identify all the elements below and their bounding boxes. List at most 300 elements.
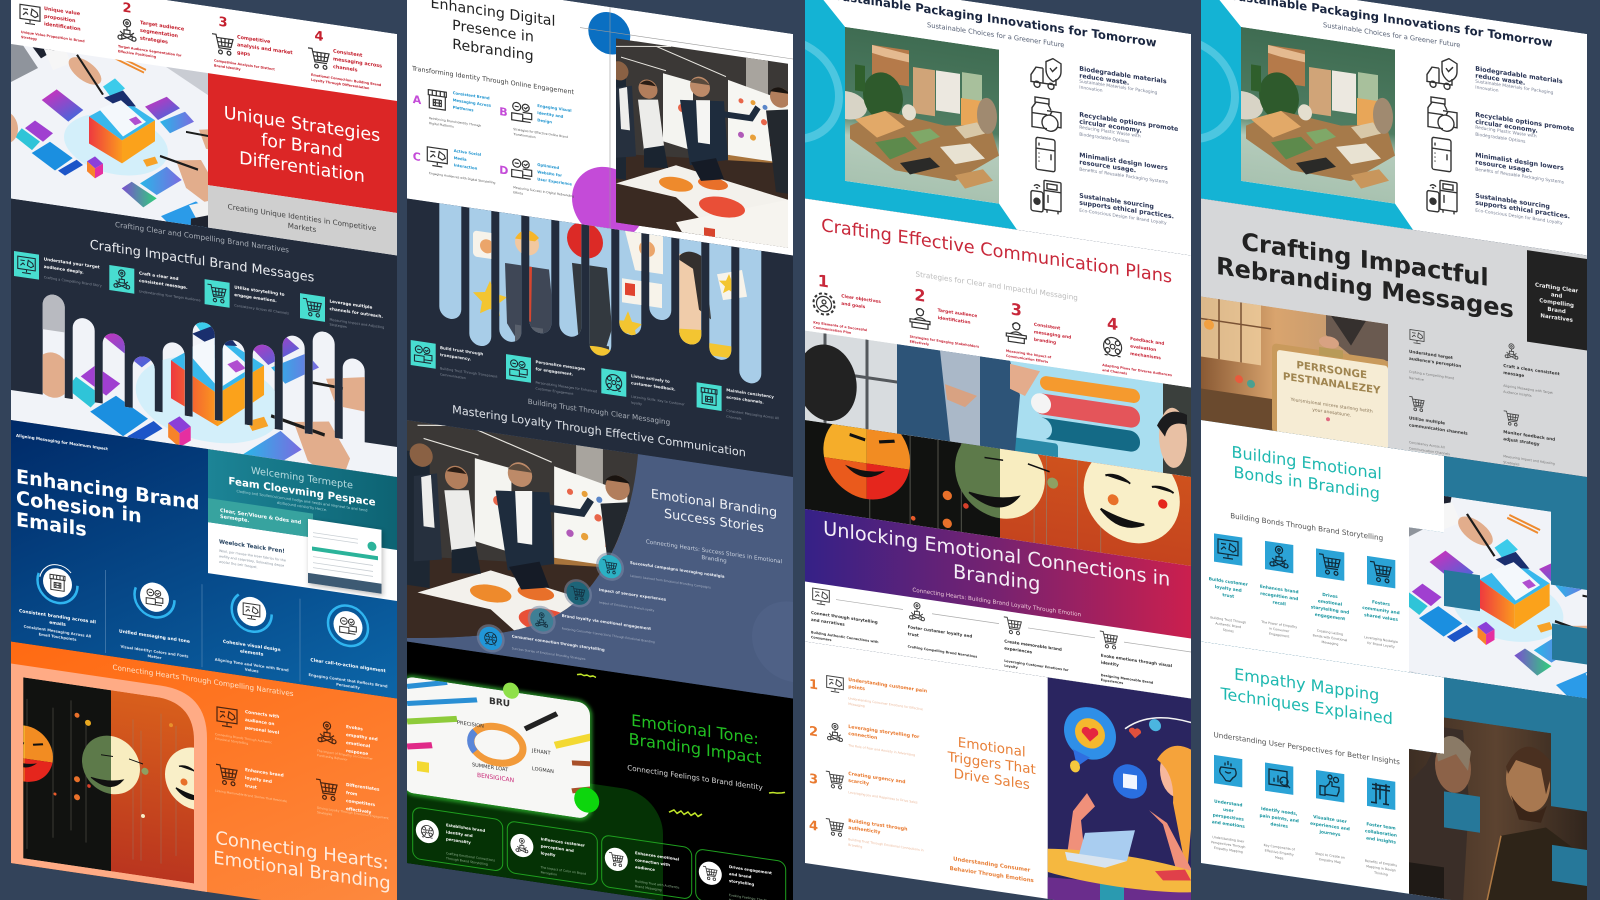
item 3: Fostering Consumer Connections Through Emotional Branding xyxy=(562,626,655,644)
heading: Enhancing Brand xyxy=(16,465,200,515)
column 1: Empathy Mapping xyxy=(1214,846,1243,854)
card 3: Building Trust with Authentic xyxy=(635,879,679,890)
item 2: Aligning Messaging with Target xyxy=(1503,384,1553,395)
black label box xyxy=(1527,250,1587,350)
item 2 xyxy=(910,285,979,354)
card 1: identity and xyxy=(446,829,473,838)
decorative circles xyxy=(572,12,640,232)
item 4: Sustainable sourcing xyxy=(1475,193,1550,211)
card 3: audience xyxy=(635,864,655,872)
photo: branding sketch and markers: PRECISION xyxy=(457,720,484,730)
row 1: Understanding customer pain xyxy=(848,678,927,695)
item 2 xyxy=(119,582,190,660)
item 1 xyxy=(215,706,279,745)
item D xyxy=(499,156,574,203)
item 3: Leveraging Customer Emotions for xyxy=(1004,659,1068,672)
item 4: identity xyxy=(1101,660,1119,667)
subtitle: Understanding User Perspectives for Better Insights xyxy=(1214,730,1400,766)
panel: column 3 slide 3 emotional connections xyxy=(798,322,1264,710)
item 4: evaluation xyxy=(1130,343,1156,353)
white content block xyxy=(1201,420,1444,678)
item 1: Innovation xyxy=(1079,85,1103,94)
item 2 xyxy=(564,577,667,620)
photo: branding sketch and markers xyxy=(402,676,592,820)
item 3: Minimalist design lowers xyxy=(1475,152,1564,172)
column 3: experiences and xyxy=(1310,821,1350,832)
item B: Design xyxy=(537,117,552,124)
heading: Mastering Loyalty Through Effective Communication xyxy=(452,403,746,460)
item 2: Personalizing Messages for Enhanced xyxy=(536,380,597,394)
item 2: Purchasing Behavior xyxy=(317,753,348,762)
item 1: Understand target xyxy=(1409,349,1453,360)
row 4 xyxy=(809,812,924,858)
item 4 xyxy=(697,382,779,426)
photo: branding sketch and markers: BENSIGICAN xyxy=(477,772,514,784)
item 1: Unique Value Proposition in Brand xyxy=(21,30,85,43)
item 4: supports ethical practices. xyxy=(1079,200,1174,220)
item B: B xyxy=(499,105,508,119)
panel: column 3 slide 2 communication plans xyxy=(797,197,1191,479)
item A: Messaging Across xyxy=(453,97,492,108)
photo: personal sign: PERRSONGE xyxy=(1296,359,1367,382)
item 3 xyxy=(1409,396,1468,459)
item 3: Listen actively to xyxy=(631,373,670,384)
item 2: Reducing Plastic Waste with xyxy=(1475,126,1537,140)
item 4: Eco-Conscious Design for Brand Loyalty xyxy=(1475,208,1563,226)
column 3: Empathy Map xyxy=(1319,857,1341,864)
row 3: 3 xyxy=(809,772,818,788)
subtitle: Connecting Hearts: Building Brand Loyalty Through Emotion xyxy=(912,588,1082,619)
item 1: Lessons Learned from Emotional Branding Campaigns xyxy=(630,574,711,590)
item 1: Email Touchpoints xyxy=(39,632,77,642)
accent circles xyxy=(503,681,599,814)
item D: Optimized xyxy=(537,162,559,170)
column 3: Bonds with Emotional xyxy=(1313,633,1347,642)
panel: column 3 slide 1 sustainable packaging xyxy=(741,0,1191,256)
item 2: Customer Engagement xyxy=(536,386,574,396)
item 1: emails xyxy=(49,620,66,628)
item 3: elements xyxy=(240,648,264,658)
item 3 xyxy=(1432,137,1565,189)
item 3: resource usage. xyxy=(1475,159,1532,174)
item 2: Reducing Plastic Waste with xyxy=(1079,126,1141,140)
item 2: Unified messaging and tone xyxy=(119,628,190,645)
image glow xyxy=(402,676,590,820)
item 3: Communication Efforts xyxy=(1006,354,1048,364)
item 4: Measuring Impact and Adjusting xyxy=(330,318,384,330)
panel: column 4 slide 4 empathy mapping xyxy=(1201,642,1591,900)
item 4: Strategies xyxy=(1503,460,1520,467)
item 3: Utilize multiple xyxy=(1409,415,1445,426)
row 4: Building Trust Through Emotional Connections in xyxy=(848,837,924,852)
heading: Differentiation xyxy=(239,149,365,187)
item 3: Competitive Analysis for Distinct xyxy=(214,58,275,71)
white content block xyxy=(1201,642,1444,899)
subtitle: Sustainable Choices for a Greener Future xyxy=(1323,21,1460,49)
item 2: Recyclable options promote xyxy=(1475,112,1574,133)
item 1: audience deeply. xyxy=(44,264,84,275)
item 2: empathy and xyxy=(346,732,378,743)
email template image: Welceming Termepte xyxy=(251,465,353,491)
heading: Drive Sales xyxy=(954,766,1030,793)
heading: for Brand xyxy=(261,131,343,162)
column 2: recall xyxy=(1272,600,1286,608)
subtitle: Building Bonds Through Brand Storytelling xyxy=(1230,511,1383,543)
column 1 xyxy=(1209,533,1249,636)
item 1: Build trust through xyxy=(440,345,483,356)
item 2: strategies xyxy=(140,35,168,46)
column 1: loyalty and xyxy=(1215,584,1242,594)
row 1: points xyxy=(848,684,865,692)
item 4: competitors xyxy=(346,798,376,808)
column 3: Creating Lasting xyxy=(1317,629,1343,636)
item 4: Consistent xyxy=(333,49,362,59)
card 1: Through Brand Storytelling xyxy=(445,856,488,866)
item 3: messaging and xyxy=(1034,329,1071,341)
illustration: faces banner xyxy=(798,322,1264,685)
heading: Emotional Tone: xyxy=(631,711,759,748)
item 2 xyxy=(908,601,977,659)
email template image: Sermepte. xyxy=(220,514,249,524)
item 2 xyxy=(1428,97,1574,152)
photo: personal sign xyxy=(1201,296,1388,450)
heading: Emotional Branding xyxy=(651,487,777,521)
item 3: communication channels xyxy=(1409,422,1468,436)
item 2: Effective Positioning xyxy=(118,49,157,59)
item 1 xyxy=(19,564,96,641)
item 3: experiences xyxy=(1004,645,1033,655)
illustration: emotional faces xyxy=(23,677,194,884)
item 3 xyxy=(528,604,655,651)
panel: column 1 slide 4 connecting hearts xyxy=(0,637,397,900)
photo: branding sketch and markers: LOGMAN xyxy=(532,766,554,775)
heading: Emails xyxy=(16,508,87,541)
column 2 xyxy=(1260,540,1299,640)
photo: packaging materials xyxy=(1223,24,1395,204)
row 3: Leveraging Joy and Happiness to Drive Sales xyxy=(848,790,918,805)
panel: column 2 slide 3 success stories xyxy=(381,392,832,727)
card 3: Enhances emotional xyxy=(635,850,679,862)
column 4 xyxy=(1362,555,1400,650)
column 1: and emotions xyxy=(1212,819,1245,830)
item A: Platforms xyxy=(453,104,474,113)
item 2: identification xyxy=(938,315,970,326)
item 4 xyxy=(1031,178,1174,231)
item 4: Eco-Conscious Design for Brand Loyalty xyxy=(1079,208,1167,226)
item 4: Driving Loyalty Through Emotional Engagement xyxy=(317,806,389,820)
item 3: Consistency Across All Channels xyxy=(234,303,289,316)
item 2: Craft a clear and xyxy=(139,270,179,281)
dividers xyxy=(106,570,300,682)
email template image: Feam Cloevming Pespace xyxy=(228,475,376,509)
email template image: wofilly and cespretay, Solorailing deese xyxy=(219,554,284,568)
item 4: 4 xyxy=(314,29,324,45)
item 2: Crafting Compelling Brand Narratives xyxy=(908,645,977,659)
card 1 xyxy=(413,807,503,872)
heading: Emotional xyxy=(958,735,1026,761)
item D: User Experience xyxy=(537,176,572,187)
item A: A xyxy=(413,93,422,107)
card 4: Drives engagement xyxy=(729,864,772,875)
item 1 xyxy=(811,588,879,649)
item 4: across channels. xyxy=(726,394,764,405)
email template image: woolar the selr facepel. xyxy=(219,560,257,569)
item 2 xyxy=(109,265,201,304)
subtitle: Branding xyxy=(701,555,727,565)
column 1: Builds customer xyxy=(1209,577,1248,588)
column 3: journeys xyxy=(1319,829,1341,838)
item C: Media xyxy=(454,155,467,162)
column 2: Engagement xyxy=(1269,632,1290,639)
row 1: Messaging xyxy=(848,702,865,708)
item 4: Leverage multiple xyxy=(330,299,372,310)
item 1 xyxy=(14,251,102,289)
subtitle: Transforming Identity Through Online Engagement xyxy=(411,64,575,96)
card 4: storytelling xyxy=(729,878,755,887)
item C: C xyxy=(413,150,421,164)
item 4: Sustainable sourcing xyxy=(1079,193,1154,211)
item 1: Building Authentic Connections with xyxy=(811,630,878,644)
item 4 xyxy=(1100,631,1173,692)
item 2: circular economy. xyxy=(1475,119,1538,135)
panel: red title block xyxy=(208,73,397,213)
card 2: perception and xyxy=(541,843,574,853)
column 4: shared values xyxy=(1364,612,1398,623)
item 4: Evoke emotions through visual xyxy=(1101,653,1172,668)
item 3 xyxy=(205,279,289,317)
item 2: Foster customer loyalty and xyxy=(908,624,972,639)
panel: column 2 slide 1 digital presence xyxy=(407,0,801,271)
photo: personal sign: Yoursmisional micere starlong hetith xyxy=(1291,398,1373,415)
item B xyxy=(499,97,572,145)
photo: branding sketch and markers: JEHANT xyxy=(531,748,551,757)
heading: Rebranding xyxy=(452,37,534,65)
item 3: Listening Skills: Key to Customer xyxy=(631,395,685,407)
item 4: Personality xyxy=(336,683,360,690)
item 2: Craft a clear, consistent xyxy=(1503,363,1560,376)
row 2: 2 xyxy=(809,724,818,740)
panel: grey subtitle block xyxy=(208,185,397,256)
item 4: and Channels xyxy=(1102,368,1127,376)
black label box: Narratives xyxy=(1540,313,1574,324)
item 1: Strategy xyxy=(21,35,38,41)
card 4 xyxy=(696,849,786,900)
black label box: Brand xyxy=(1547,307,1566,315)
item 1: personal level xyxy=(245,725,280,736)
photo: team meeting xyxy=(381,392,643,699)
item 4: from xyxy=(346,790,358,798)
item D: D xyxy=(499,163,508,178)
item B: Engaging Visual xyxy=(537,103,572,113)
item 4: 4 xyxy=(1107,314,1118,334)
subtitle: Connecting Hearts Through Compelling Narratives xyxy=(112,663,294,698)
photo: branding sketch and markers: BRU xyxy=(489,697,510,710)
item 1: Crafting a Compelling Brand xyxy=(1409,370,1454,380)
item A: Digital Platforms xyxy=(429,121,454,129)
column 3: engagement xyxy=(1315,612,1345,622)
item 3: Brand Identity xyxy=(214,63,242,72)
item 4: Designing Memorable Brand xyxy=(1101,673,1153,685)
column 3: Messaging xyxy=(1322,640,1338,646)
item 2: The Impact of Empathy on Consumer xyxy=(317,749,373,761)
panel: column 4 slide 2 rebranding messages xyxy=(1201,198,1587,479)
item 4: Differentiates xyxy=(346,783,379,793)
card 1: Establishes brand xyxy=(446,822,485,833)
panel: column 1 slide 1 unique strategies xyxy=(11,0,397,256)
squiggle accents xyxy=(577,674,785,829)
item 1: Connects with xyxy=(245,710,279,720)
column 4: Foster team xyxy=(1366,822,1396,832)
item D: Efforts xyxy=(513,190,523,196)
item 1: Building Trust Through Transparent xyxy=(440,366,497,379)
row 2 xyxy=(809,718,920,758)
column 2: desires xyxy=(1270,821,1288,830)
column 2: Maps xyxy=(1275,855,1284,861)
item C: Interaction xyxy=(454,162,478,171)
item 2 xyxy=(1503,343,1560,402)
item 1 xyxy=(596,551,725,598)
subtitle: Building Trust Through Clear Messaging xyxy=(528,397,670,427)
photo: packaging materials xyxy=(827,24,999,204)
item 3: Consistency Across All xyxy=(1409,440,1445,449)
item 1: Consistent branding across all xyxy=(19,609,96,626)
item 2 xyxy=(506,354,597,400)
card 2: The Impact of Color on Brand xyxy=(541,865,586,876)
item 3: Communication Channels xyxy=(1409,446,1450,456)
row 3: scarcity xyxy=(848,778,869,787)
item 2: Visual Identity: Colors and Fonts xyxy=(120,645,189,659)
column 2: The Power of Empathy xyxy=(1261,620,1297,629)
row 4: 4 xyxy=(809,818,818,835)
column 3 xyxy=(1310,769,1350,866)
heading: Empathy Mapping xyxy=(1234,664,1379,705)
column 1: Perspectives Through xyxy=(1211,840,1245,849)
subtitle: Sustainable Choices for a Greener Future xyxy=(927,21,1064,49)
panel: column 2 slide 2 mastering loyalty xyxy=(407,178,793,477)
item 3: Benefits of Reusable Packaging Systems xyxy=(1475,167,1565,186)
item 2: Biodegradable Options xyxy=(1475,132,1526,145)
heading: Crafting Impactful Brand Messages xyxy=(90,238,315,286)
item 1: audience's perception xyxy=(1409,356,1461,368)
item 2: Effectively xyxy=(910,340,930,347)
subtitle: Strategies for Clear and Impactful Messaging xyxy=(916,269,1078,302)
item D: Website for xyxy=(537,169,562,178)
item 1: audience on xyxy=(245,717,274,727)
heading: Crafting Effective Communication Plans xyxy=(821,215,1172,288)
item 1: reduce waste. xyxy=(1475,73,1525,87)
black label box: Compelling xyxy=(1539,298,1574,309)
card 3 xyxy=(602,835,692,899)
dark green shape xyxy=(357,749,663,900)
email template image: Weelock Teaick Pren! xyxy=(219,539,285,555)
teal overlay squares xyxy=(1444,791,1588,886)
photo: two men xyxy=(1401,701,1591,900)
item 3: engage emotions. xyxy=(234,292,277,303)
panel: column 1 slide 3 email cohesion xyxy=(11,420,397,699)
panel: column 4 slide 1 sustainable packaging xyxy=(1137,0,1587,256)
item 2: 2 xyxy=(914,285,926,306)
item 2: Evokes xyxy=(346,725,363,732)
column 1: Building Trust Through xyxy=(1210,615,1246,625)
item 2: Target audience xyxy=(938,308,977,319)
item 2: Target Audience Segmentation for xyxy=(118,44,182,58)
item 1: proposition xyxy=(44,14,76,24)
column 1: Understand xyxy=(1214,799,1242,809)
item 2: response xyxy=(346,748,368,757)
photo: presenter and infographic xyxy=(797,329,1191,479)
card 2 xyxy=(507,821,597,886)
item 3: Consistent xyxy=(1034,323,1060,332)
row 1 xyxy=(809,671,927,717)
item 4: Channels xyxy=(726,415,742,421)
item 2 xyxy=(117,2,184,58)
subtitle: Behavior Through Emotions xyxy=(950,866,1034,884)
column 2: Effective Empathy xyxy=(1265,849,1294,857)
row 4: authenticity xyxy=(848,825,880,836)
item 3: Linking Memorable Brand Stories That Resonate xyxy=(215,789,287,803)
item 2: Impact of Emotions on Brand Loyalty xyxy=(599,600,654,613)
subtitle: Understanding Consumer xyxy=(953,856,1030,874)
column 2: pain points, and xyxy=(1260,813,1299,824)
column 4: Thinking xyxy=(1373,871,1388,877)
item 1: Innovation xyxy=(1475,85,1499,94)
card 3: Brand Messaging xyxy=(635,884,662,892)
card 2: Perception xyxy=(541,870,557,877)
item 1 xyxy=(19,4,84,42)
item 1: Clear objectives xyxy=(841,294,881,305)
item 2: Personalize messages xyxy=(536,359,585,371)
item 1: Communication Plan xyxy=(813,325,852,335)
column 2: Key Components of xyxy=(1264,843,1295,852)
column 1: trust xyxy=(1222,592,1234,600)
item 3: loyalty and xyxy=(245,775,272,785)
heading: Branding Impact xyxy=(629,729,761,768)
item 1: Consumers xyxy=(811,635,832,642)
item C: Active Social xyxy=(454,148,481,157)
row 2: The Role of Fear and Anxiety in Advertising xyxy=(847,743,915,757)
item 4: messaging across xyxy=(333,56,382,69)
item 3: Create memorable brand xyxy=(1004,638,1062,652)
row 1: 1 xyxy=(809,677,818,693)
item 3 xyxy=(1006,299,1071,367)
item 4: Loyalty Through Differentiation xyxy=(311,78,370,91)
item 4: Strategies xyxy=(330,323,347,329)
item 1: and narratives xyxy=(811,617,845,627)
item 3: Loyalty xyxy=(1004,664,1019,670)
teal overlay squares xyxy=(1444,570,1588,665)
item 1: Biodegradable materials xyxy=(1079,66,1167,85)
item 4 xyxy=(300,293,384,330)
email template image: Wool, por mouse the treer fabriss for the xyxy=(219,549,286,563)
item C: Engaging Audiences with Digital Storytelling xyxy=(429,171,495,185)
item 3: trust xyxy=(245,783,257,791)
item 4: Experiences xyxy=(1101,678,1123,685)
row 2: Leveraging storytelling for xyxy=(848,725,919,740)
item 1: Biodegradable materials xyxy=(1475,66,1563,85)
card 2: Influences customer xyxy=(541,836,585,848)
item 3 xyxy=(1004,617,1069,677)
column 4: collaboration xyxy=(1365,828,1397,839)
item 4 xyxy=(477,622,605,669)
item B: Strategies for Effective Online Brand xyxy=(513,127,568,139)
heading: Bonds in Branding xyxy=(1233,463,1380,503)
item 4 xyxy=(1503,411,1555,472)
item 4: Strategies xyxy=(317,810,333,816)
item 3: branding xyxy=(1034,337,1056,346)
item 4 xyxy=(308,28,382,92)
item 4: supports ethical practices. xyxy=(1475,200,1570,220)
item 1: Crafting a Compelling Brand Story xyxy=(44,275,102,288)
